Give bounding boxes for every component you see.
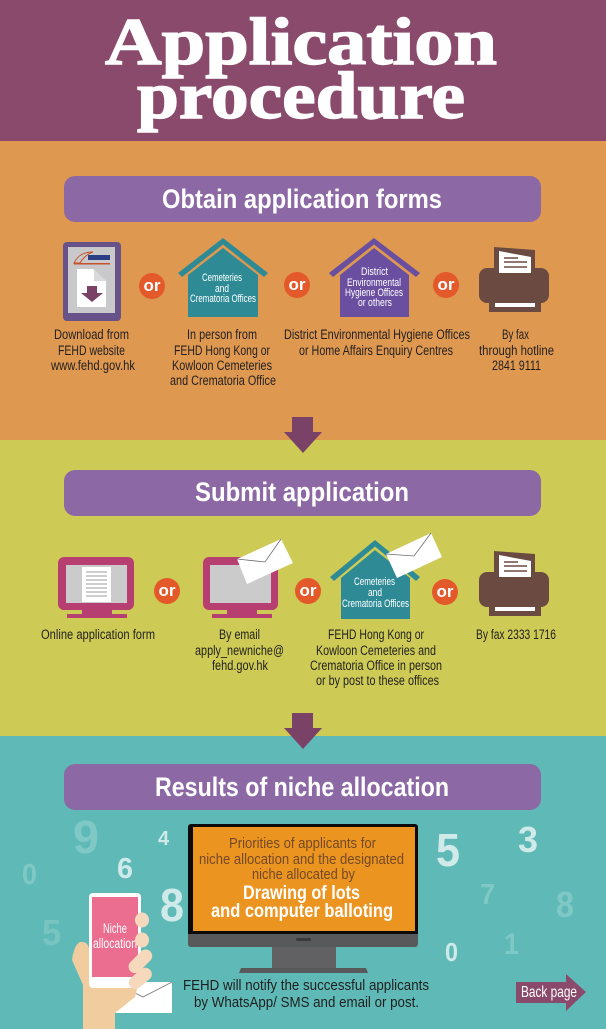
decorative numbers: 5	[42, 912, 61, 953]
icon: computer monitor with balloting text: Priorities of applicants for	[229, 835, 376, 852]
icon: house with envelope: Cemeteries	[354, 576, 395, 588]
icon: cemeteries office house: Cemeteries	[202, 272, 242, 284]
or badge: or	[158, 581, 176, 600]
decorative numbers: 3	[518, 819, 538, 860]
text: notification: by WhatsApp/ SMS and email or post.	[194, 994, 419, 1011]
text: in person or by post: Crematoria Office in person	[310, 658, 442, 673]
text: in person: and Crematoria Office	[170, 373, 276, 388]
text: by email: By email	[219, 627, 260, 642]
text: district offices: or Home Affairs Enquiry Centres	[299, 343, 453, 358]
heading: results of niche allocation	[64, 764, 541, 810]
text: in person: FEHD Hong Kong or	[174, 343, 270, 358]
or badge: or	[288, 275, 306, 294]
or badge	[295, 578, 321, 604]
panel: submit application	[0, 440, 606, 736]
icon: online form monitor	[58, 557, 134, 618]
decorative numbers	[22, 811, 574, 967]
decorative numbers: 0	[22, 859, 37, 891]
text: in person or by post: or by post to these offices	[316, 673, 439, 688]
text: in person: In person from	[187, 327, 257, 342]
text: in person or by post: FEHD Hong Kong or	[328, 627, 424, 642]
icon: email monitor	[203, 539, 293, 618]
text: by fax number: By fax 2333 1716	[476, 627, 556, 642]
icon: district office house: or others	[358, 297, 392, 309]
title: Application	[105, 5, 497, 79]
arrow: submit to results	[284, 713, 322, 749]
arrow: obtain to submit	[284, 417, 322, 453]
icon: tablet download	[63, 242, 121, 321]
icon: fax printer	[479, 551, 549, 616]
text: by fax hotline	[479, 327, 554, 373]
icon: house with envelope: and	[368, 587, 382, 599]
icon: computer monitor with balloting text: niche allocation and the designated	[199, 851, 404, 868]
icon: house with envelope	[330, 533, 442, 619]
text: by fax hotline: By fax	[502, 327, 529, 342]
icon: district office house: Environmental	[347, 277, 401, 289]
icon: hand holding phone: allocation	[93, 936, 137, 951]
heading: submit application	[64, 470, 541, 516]
decorative numbers: 7	[480, 879, 495, 911]
text: notification	[183, 977, 429, 1011]
icon: cemeteries office house: and	[215, 283, 229, 295]
panel: results of niche allocation	[0, 736, 606, 1029]
text: online application form: Online application form	[41, 627, 155, 642]
title: procedure	[137, 59, 465, 133]
decorative numbers: 5	[436, 824, 460, 876]
or badge	[432, 579, 458, 605]
title	[105, 5, 497, 133]
text: download from website: www.fehd.gov.hk	[50, 358, 135, 373]
icon: envelope	[115, 982, 172, 1013]
text: by fax hotline: 2841 9111	[492, 358, 541, 373]
text: download from website: Download from	[54, 327, 129, 342]
or badge: or	[436, 582, 454, 601]
or badge: or	[300, 581, 317, 600]
text: by fax hotline: through hotline	[479, 343, 554, 358]
heading: submit application: Submit application	[195, 477, 409, 507]
text: download from website	[50, 327, 135, 373]
decorative numbers: 8	[556, 884, 574, 925]
arrow: back page: Back page	[521, 984, 577, 1001]
decorative numbers: 9	[73, 811, 99, 863]
icon: district office house	[329, 238, 420, 317]
icon: house with envelope: Crematoria Offices	[342, 598, 409, 610]
decorative numbers: 4	[158, 828, 170, 850]
icon: cemeteries office house: Crematoria Offices	[190, 293, 256, 305]
heading: obtain application forms	[64, 176, 541, 222]
heading: results of niche allocation: Results of niche allocation	[155, 772, 449, 802]
icon: computer monitor with balloting text: niche allocated by	[252, 866, 355, 883]
text: district offices	[284, 327, 470, 358]
text: in person or by post	[310, 627, 442, 688]
icon: computer monitor with balloting text: and computer balloting	[211, 900, 393, 922]
text: in person: Kowloon Cemeteries	[172, 358, 272, 373]
icon: district office house: District	[361, 266, 388, 278]
text: district offices: District Environmental Hygiene Offices	[284, 327, 470, 342]
or badge	[154, 578, 180, 604]
heading: obtain application forms: Obtain application forms	[162, 184, 442, 214]
decorative numbers: 1	[504, 928, 519, 961]
icon: computer monitor with balloting text: Drawing of lots	[243, 882, 360, 904]
or badge: or	[144, 276, 161, 295]
or badge: or	[438, 275, 455, 294]
decorative numbers: 8	[160, 879, 184, 931]
header band	[0, 0, 606, 141]
text: in person or by post: Kowloon Cemeteries and	[316, 643, 436, 658]
arrow: back page	[516, 974, 586, 1011]
or badge	[433, 272, 459, 298]
text: by email: apply_newniche@	[195, 643, 284, 658]
decorative numbers: 0	[445, 937, 458, 967]
text: notification: FEHD will notify the successful applicants	[183, 977, 429, 994]
text: download from website: FEHD website	[58, 343, 125, 358]
icon: cemeteries office house	[178, 238, 268, 317]
icon: computer monitor with balloting text	[188, 824, 418, 973]
decorative numbers: 6	[117, 853, 133, 885]
icon: hand holding phone: Niche	[103, 921, 127, 936]
icon: fax printer	[479, 247, 549, 312]
text: by email: fehd.gov.hk	[212, 658, 268, 673]
icon: hand holding phone	[72, 893, 155, 1029]
text: by email	[195, 627, 284, 673]
or badge	[284, 272, 310, 298]
text: in person	[170, 327, 276, 388]
or badge	[139, 273, 165, 299]
panel: obtain application forms	[0, 141, 606, 440]
icon: district office house: Hygiene Offices	[345, 287, 403, 299]
